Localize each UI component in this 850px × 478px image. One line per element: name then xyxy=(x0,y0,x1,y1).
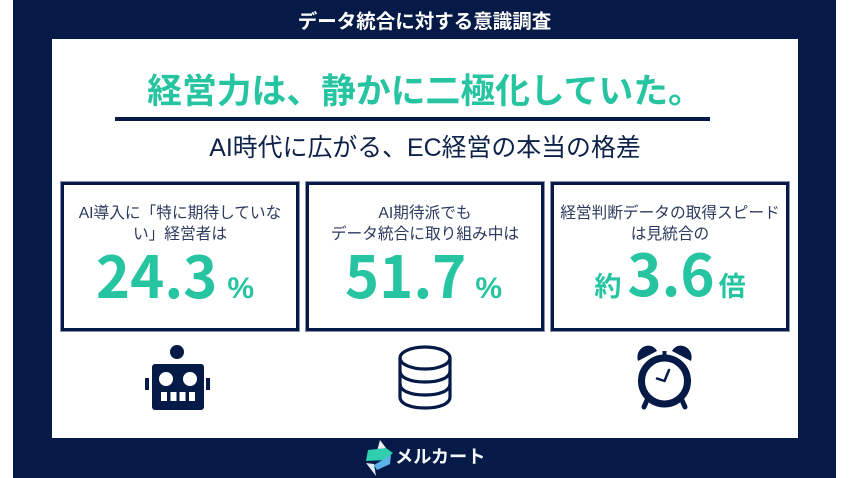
card: speed xyxy=(550,181,790,332)
card caption: AI期待派でも xyxy=(378,205,472,222)
card caption line 2: は見統合の xyxy=(631,226,709,243)
card: AI not expected xyxy=(60,181,300,332)
card: data integration xyxy=(305,181,545,332)
card caption line 2: データ統合に取り組み中は xyxy=(331,226,519,243)
header title: データ統合に対する意識調査 xyxy=(298,11,551,33)
stat: 51.7%: 51.7 % xyxy=(345,231,502,315)
icon: robot xyxy=(145,345,210,410)
logo mark xyxy=(366,440,393,476)
icon: alarm clock xyxy=(637,346,692,410)
card caption: 経営判断データの取得スピード xyxy=(560,205,780,222)
icon: database xyxy=(398,345,452,410)
logo: Mercart xyxy=(366,440,485,476)
main headline: 経営力は、静かに二極化していた。 xyxy=(147,72,703,111)
card caption: AI導入に「特に期待していな xyxy=(79,205,281,222)
card caption line 2: い」経営者は xyxy=(133,226,227,243)
subtitle: AI時代に広がる、EC経営の本当の格差 xyxy=(209,134,641,162)
stat: about 3.6 times: 約3.6倍 xyxy=(594,229,746,313)
logo wordmark: メルカート xyxy=(395,447,485,467)
stat: 24.3%: 24.3 % xyxy=(96,231,254,315)
headline underline xyxy=(115,117,710,121)
white content panel xyxy=(52,39,798,438)
